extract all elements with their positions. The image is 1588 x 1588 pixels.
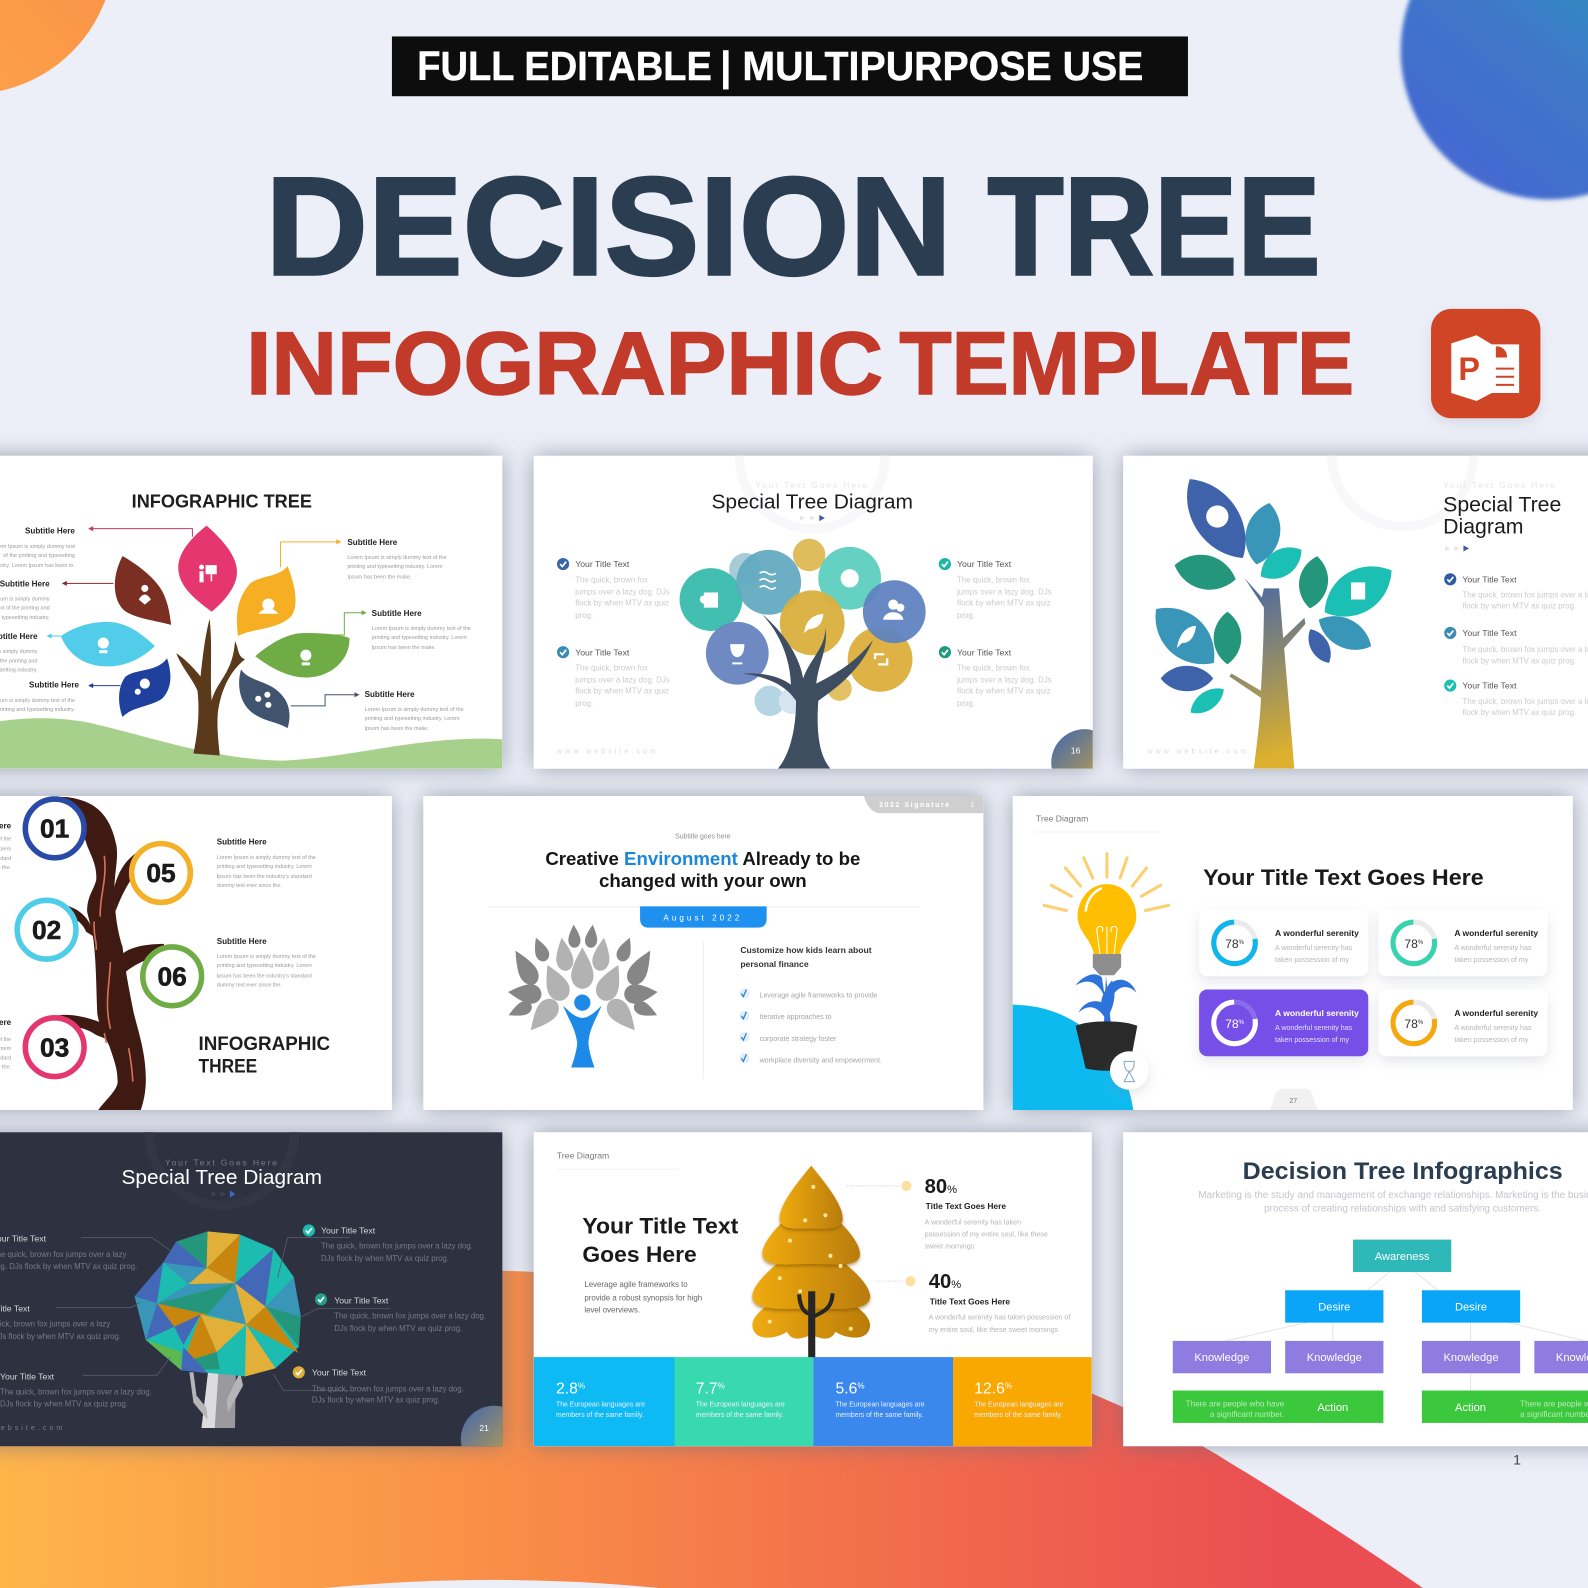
stat band: %: [718, 1381, 725, 1390]
labels right: printing and typesetting industry. Lorem: [217, 963, 312, 969]
right bullets: Your Title Text: [957, 559, 1012, 569]
labels left: [0, 821, 12, 1070]
right callouts: The quick, brown fox jumps over a lazy dog.: [334, 1312, 486, 1321]
stat band: members of the same family.: [556, 1412, 644, 1419]
heading: Your Text Goes Here: [165, 1158, 279, 1168]
heading: Your Title Text Goes Here: [1203, 865, 1484, 890]
heading: Your Text Goes Here: [1443, 480, 1557, 490]
number badges: 05: [146, 858, 176, 888]
stat band: %: [857, 1381, 865, 1390]
description: [1198, 1190, 1588, 1214]
bullets: flock by when MTV ax quiz prog.: [1462, 708, 1576, 717]
right bullets: [939, 558, 1052, 708]
stat 80: 80%: [925, 1176, 957, 1198]
right bullets: The quick, brown fox: [957, 663, 1030, 672]
subtitle: infographic template: TEMPLATE: [899, 313, 1354, 413]
stat band: members of the same family.: [836, 1412, 923, 1419]
heading: [1443, 480, 1561, 539]
header label: [1036, 813, 1160, 832]
card 2: taken possession of my: [1454, 956, 1529, 964]
icon: powerpoint: P: [1458, 351, 1480, 387]
page corner: 21: [479, 1423, 489, 1433]
pager dots: [800, 515, 815, 521]
page tab: [1270, 1089, 1318, 1110]
bullets: flock by when MTV ax quiz prog.: [1462, 602, 1576, 611]
signature tab: 1: [970, 801, 974, 809]
card 4: taken possession of my: [1454, 1036, 1529, 1044]
right callouts: Your Title Text: [334, 1295, 389, 1305]
card 2: [1378, 909, 1547, 976]
panel: special tree diagram circles: [520, 442, 1106, 782]
leaves: [1156, 479, 1392, 714]
date pill: [640, 906, 767, 928]
stat band: 12.6: [974, 1381, 1005, 1398]
decorative bottom arc: [324, 1580, 658, 1588]
heading: [582, 1214, 739, 1267]
stat band: 2.8: [556, 1381, 578, 1398]
card 3 purple: 78: [1225, 1017, 1239, 1031]
icon: powerpoint: [1431, 309, 1540, 418]
left labels: the printing and: [0, 658, 37, 664]
heading: Diagram: [1443, 515, 1523, 539]
card 3 purple: taken possession of my: [1275, 1036, 1349, 1044]
right labels: Ipsum has been the make.: [347, 574, 412, 580]
description: [584, 1280, 702, 1315]
right callouts: The quick, brown fox jumps over a lazy dog.: [321, 1242, 473, 1251]
bulb: [1078, 884, 1136, 975]
flow boxes: a significant number.: [1210, 1410, 1284, 1419]
left bullets: prog.: [575, 699, 593, 708]
card 2: 78: [1404, 937, 1418, 951]
stat band: The European languages are: [836, 1402, 925, 1409]
badge: [1110, 1051, 1148, 1090]
polygon canopy: [135, 1232, 301, 1376]
right labels: printing and typesetting industry. Lorem: [347, 564, 443, 570]
stat band: 5.6: [836, 1381, 857, 1398]
labels right: Lorem Ipsum is simply dummy text of the: [217, 855, 316, 861]
left bullets: flock by when MTV ax quiz: [575, 599, 669, 608]
connector lines: [56, 1238, 390, 1391]
flow boxes: [1173, 1240, 1588, 1423]
card 1: A wonderful serenity: [1275, 928, 1359, 938]
heading: [122, 1158, 322, 1189]
heading: Special Tree Diagram: [122, 1167, 322, 1189]
page corner: 16: [1071, 745, 1081, 755]
connectors: [1225, 1272, 1585, 1391]
checklist: corporate strategy foster: [760, 1035, 837, 1043]
leaf icons: [98, 565, 311, 708]
card 3 purple: A wonderful serenity: [1275, 1008, 1359, 1018]
panel: pine tree stats: [534, 1132, 1092, 1446]
left callouts: DJs flock by when MTV ax quiz prog.: [0, 1400, 128, 1409]
tree circles: [680, 539, 926, 716]
left bullets: [557, 558, 670, 708]
stat 40: my entire soul, like these sweet mornings: [929, 1326, 1059, 1334]
card 2: %: [1418, 940, 1424, 946]
stat band: members of the same family.: [974, 1412, 1062, 1419]
card 3 purple: [1199, 989, 1368, 1056]
card 4: %: [1418, 1020, 1424, 1026]
stat 40: Title Text Goes Here: [930, 1296, 1010, 1306]
trunk: [1229, 578, 1305, 769]
stat 40: 40%: [929, 1271, 961, 1293]
checklist: Iterative approaches to: [760, 1013, 832, 1021]
right bullets: prog.: [957, 611, 975, 620]
number badges: 06: [158, 961, 187, 991]
panel: special tree diagram leaves: [1123, 385, 1588, 769]
decorative blue circle top right: [1401, 0, 1588, 200]
header label: Tree Diagram: [1036, 813, 1088, 823]
flow boxes: Action: [1317, 1402, 1348, 1414]
flow boxes: Desire: [1318, 1302, 1350, 1314]
right bullets: flock by when MTV ax quiz: [957, 687, 1051, 696]
checklist: workplace diversity and empowerment.: [759, 1056, 882, 1064]
title: decision tree: TREE: [987, 147, 1321, 304]
flow boxes: Desire: [1455, 1302, 1487, 1314]
panel: decision tree flow chart: [1123, 1132, 1588, 1446]
right bullets: flock by when MTV ax quiz: [957, 599, 1051, 608]
left bullets: The quick, brown fox: [575, 663, 648, 672]
rays: [1044, 854, 1169, 910]
title: decision tree: [265, 147, 1321, 304]
left labels: Subtitle Here: [29, 681, 79, 690]
right callouts: Your Title Text: [312, 1367, 367, 1377]
card 4: [1378, 989, 1547, 1056]
left bullets: jumps over a lazy dog. DJs: [574, 676, 670, 685]
right labels: Lorem Ipsum is simply dummy text of the: [372, 626, 471, 632]
stat band: The European languages are: [696, 1402, 785, 1409]
subtitle: infographic template: INFOGRAPHIC: [246, 313, 883, 413]
heading: Special Tree: [1443, 492, 1561, 516]
stat band: members of the same family.: [696, 1412, 784, 1419]
panel: numbered tree: [0, 796, 392, 1110]
bullets: Your Title Text: [1462, 628, 1517, 638]
trunk: [176, 619, 245, 756]
heading: Your Text Goes Here: [755, 480, 869, 490]
card 3 purple: %: [1239, 1020, 1245, 1026]
bullets: [1444, 573, 1588, 717]
flow boxes: Knowledge: [1194, 1352, 1249, 1364]
right bullets: prog.: [957, 699, 975, 708]
trunk: [189, 1367, 243, 1428]
description: level overviews.: [584, 1306, 640, 1315]
card 1: 78: [1225, 937, 1239, 951]
description: process of creating relationships with and satisfying customers.: [1264, 1203, 1541, 1214]
right callouts: Your Title Text: [321, 1226, 376, 1236]
stat band: The European languages are: [974, 1402, 1064, 1409]
right labels: printing and typesetting industry. Lorem: [365, 716, 460, 722]
right labels: Ipsum has been the make.: [365, 726, 429, 732]
checklist: Leverage agile frameworks to provide: [760, 992, 878, 1000]
flow boxes: Action: [1455, 1402, 1486, 1414]
decorative orange circle top left: [0, 0, 114, 94]
left bullets: Your Title Text: [575, 559, 630, 569]
trunk: [56, 797, 164, 1110]
pine tree: [752, 1166, 870, 1358]
flow boxes: Knowledge: [1443, 1352, 1499, 1364]
right labels: printing and typesetting industry. Lorem: [372, 635, 467, 641]
right callouts: DJs flock by when MTV ax quiz prog.: [312, 1396, 440, 1405]
panel: infographic tree: [0, 456, 502, 769]
plant: [1076, 974, 1136, 1025]
title: decision tree: DECISION: [265, 147, 952, 304]
heading: changed with your own: [599, 870, 807, 891]
checklist: [739, 945, 882, 1064]
banner: full editable: MULTIPURPOSE USE: [742, 43, 1143, 89]
heading: Decision Tree Infographics: [1243, 1158, 1563, 1185]
website: www.website.com: [1146, 747, 1249, 755]
header label: Tree Diagram: [557, 1151, 609, 1161]
panel: dark polygon tree: [0, 1059, 528, 1473]
left labels: of the printing and typesetting: [3, 553, 75, 559]
labels right: Ipsum has been the industry's standard: [217, 973, 312, 979]
heading: Your Title Text: [582, 1214, 739, 1239]
trunk: [742, 614, 873, 769]
card 1: A wonderful serenity has: [1275, 944, 1353, 952]
labels right: printing and typesetting industry. Lorem: [217, 864, 312, 870]
pager dots: [1445, 546, 1459, 551]
labels right: Subtitle Here: [217, 838, 267, 847]
labels right: dummy text ever since the.: [217, 883, 282, 889]
right labels: Lorem Ipsum is simply dummy text of the: [347, 555, 446, 561]
left bullets: The quick, brown fox: [575, 575, 648, 584]
labels right: Lorem Ipsum is simply dummy text of the: [217, 954, 316, 960]
page corner: [461, 1406, 528, 1473]
panel: creative environment: [423, 796, 983, 1110]
stat 40: A wonderful serenity has taken possession of: [929, 1314, 1070, 1322]
right labels: Subtitle Here: [365, 690, 415, 699]
pot: [1076, 1021, 1137, 1071]
number badges: 01: [40, 814, 69, 844]
heading: Subtitle goes here: [675, 834, 731, 841]
card 2: A wonderful serenity has: [1454, 944, 1532, 952]
stat band: [534, 1357, 1092, 1446]
right bullets: jumps over a lazy dog. DJs: [956, 587, 1052, 596]
card 1: %: [1239, 940, 1245, 946]
stat band: 7.7: [696, 1381, 718, 1398]
page tab: 27: [1289, 1097, 1297, 1105]
left bullets: prog.: [575, 611, 593, 620]
labels right: [217, 838, 316, 988]
date pill: August 2022: [663, 914, 742, 923]
pager dots: [212, 1191, 226, 1197]
hill: [0, 718, 502, 769]
left labels: [0, 527, 79, 713]
stat band: %: [1005, 1381, 1012, 1390]
right labels: [347, 538, 471, 732]
stat 80: Title Text Goes Here: [926, 1201, 1006, 1211]
signature tab: 2022 Signature: [879, 801, 951, 809]
flow boxes: There are people who have: [1186, 1400, 1285, 1409]
left bullets: Your Title Text: [575, 647, 630, 657]
stat 80: A wonderful serenity has taken: [925, 1218, 1021, 1226]
website: www.website.com: [556, 747, 659, 755]
left labels: setting industry.: [0, 667, 38, 673]
bullets: Your Title Text: [1462, 681, 1517, 691]
right labels: Lorem Ipsum is simply dummy text of the: [365, 707, 464, 713]
bullets: flock by when MTV ax quiz prog.: [1462, 656, 1576, 665]
stat band: %: [578, 1381, 585, 1390]
heading: INFOGRAPHIC TREE: [132, 491, 312, 511]
left bullets: jumps over a lazy dog. DJs: [574, 587, 670, 596]
left callouts: The quick, brown fox jumps over a lazy dog.: [0, 1388, 152, 1397]
card 2: A wonderful serenity: [1454, 928, 1538, 938]
heading: Creative Environment Already to be: [545, 848, 860, 869]
heading: Goes Here: [582, 1242, 697, 1267]
card 4: A wonderful serenity has: [1454, 1024, 1532, 1032]
left labels: Subtitle Here: [0, 579, 50, 588]
right callouts: The quick, brown fox jumps over a lazy dog.: [312, 1385, 464, 1394]
number badges: 02: [32, 915, 61, 945]
leaves: [61, 526, 349, 728]
number badges: 03: [40, 1032, 69, 1062]
circle icons: [700, 569, 904, 664]
description: provide a robust synopsis for high: [584, 1293, 702, 1302]
flow boxes: Awareness: [1375, 1251, 1430, 1263]
checklist: Customize how kids learn about: [740, 945, 872, 955]
right callouts: [293, 1224, 486, 1405]
right labels: Ipsum has been the make.: [372, 645, 436, 651]
stat 80: possession of my entire soul, like these: [925, 1231, 1048, 1239]
signature tab: [864, 796, 983, 813]
subtitle: infographic template: [246, 313, 1354, 413]
stat band: The European languages are: [556, 1402, 645, 1409]
left bullets: flock by when MTV ax quiz: [575, 687, 669, 696]
heading: THREE: [198, 1057, 257, 1078]
right bullets: jumps over a lazy dog. DJs: [956, 676, 1052, 685]
labels right: Subtitle Here: [217, 937, 267, 946]
leaf icons: [1177, 505, 1365, 648]
decorative bottom gradient wave: [0, 1268, 1423, 1588]
bullets: Your Title Text: [1462, 574, 1517, 584]
left callouts: Your Title Text: [0, 1371, 55, 1381]
tree person: [506, 924, 660, 1067]
heading: [198, 1036, 330, 1072]
stat 80: sweet mornings: [925, 1243, 975, 1251]
blue blob: [891, 1005, 1134, 1248]
right bullets: The quick, brown fox: [957, 575, 1030, 584]
checklist: personal finance: [740, 959, 809, 969]
labels right: Ipsum has been the industry's standard: [217, 874, 312, 880]
labels right: dummy text ever since the.: [217, 982, 282, 988]
left labels: typesetting industry.: [2, 615, 50, 621]
heading: Special Tree Diagram: [711, 490, 913, 513]
heading: [711, 480, 913, 513]
heading: INFOGRAPHIC: [198, 1034, 330, 1055]
left callouts: [0, 1234, 152, 1409]
banner: full editable: [392, 36, 1188, 96]
card 1: [1199, 909, 1368, 976]
header label: [557, 1151, 679, 1170]
right labels: Subtitle Here: [347, 538, 398, 547]
left labels: Subtitle Here: [25, 527, 75, 536]
page corner: [1051, 729, 1093, 769]
card 3 purple: A wonderful serenity has: [1275, 1024, 1353, 1032]
connector arrows: [47, 526, 367, 706]
flow boxes: Knowledge: [1307, 1352, 1362, 1364]
right labels: Subtitle Here: [372, 609, 422, 618]
card 1: taken possession of my: [1275, 956, 1349, 964]
page number: 1: [1513, 1452, 1521, 1468]
stat 40: [876, 1271, 1070, 1334]
card 4: 78: [1404, 1017, 1418, 1031]
banner: full editable: |: [720, 43, 731, 89]
right callouts: DJs flock by when MTV ax quiz prog.: [334, 1324, 462, 1333]
stat 80: [847, 1176, 1048, 1251]
panel: your title text goes here donuts: [891, 796, 1573, 1248]
banner: full editable: FULL EDITABLE: [417, 43, 712, 89]
right bullets: Your Title Text: [957, 647, 1012, 657]
trunk highlights: [94, 856, 133, 1082]
number badges: [17, 799, 202, 1077]
card 4: A wonderful serenity: [1454, 1008, 1538, 1018]
description: Leverage agile frameworks to: [584, 1280, 688, 1289]
heading: [545, 834, 860, 891]
right callouts: DJs flock by when MTV ax quiz prog.: [321, 1254, 449, 1263]
